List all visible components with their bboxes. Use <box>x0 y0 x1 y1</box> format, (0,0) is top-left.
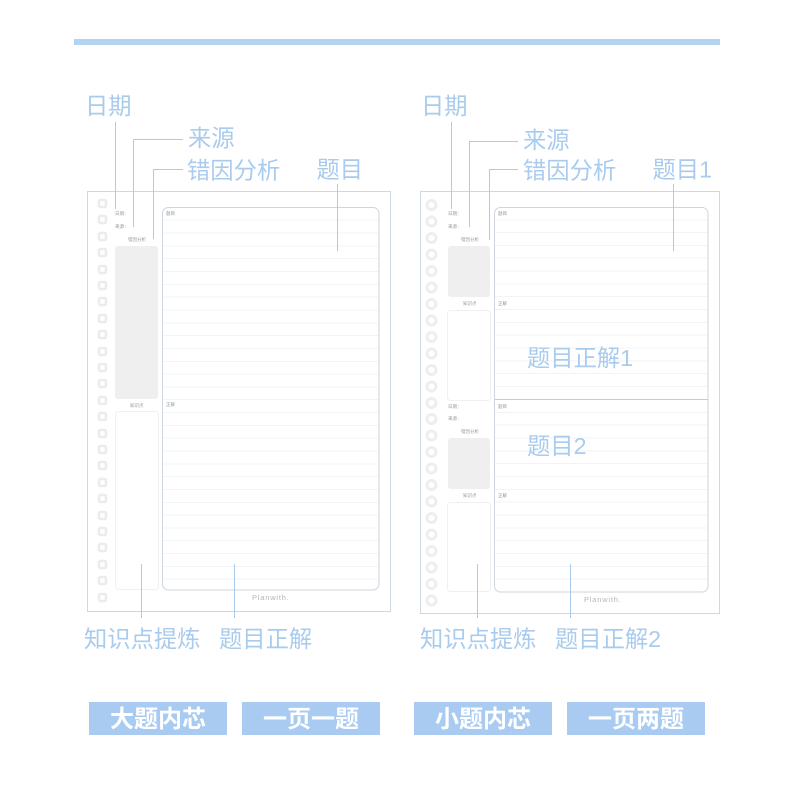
label: answer: 题目正解 <box>219 626 312 652</box>
panel: left page, big question layout <box>88 192 390 612</box>
label: question: 题目 <box>316 156 363 182</box>
small field labels: 错因分析 <box>128 236 146 243</box>
leader: question 1 <box>672 184 674 251</box>
label: question 2: 题目2 <box>527 433 587 459</box>
knowledge points box one <box>448 310 490 400</box>
leader: answer 2 <box>570 564 572 618</box>
ruled lines <box>163 220 378 579</box>
brand mark: Planwith. <box>584 595 622 604</box>
knowledge points box <box>116 412 158 590</box>
error analysis box one <box>448 246 490 297</box>
small field labels: 日期： <box>448 404 462 410</box>
badge: big question insert <box>89 702 227 735</box>
binding holes <box>427 200 436 605</box>
left callouts <box>84 93 363 652</box>
small field labels: 来源： <box>115 223 128 230</box>
small field labels: 来源： <box>448 415 462 422</box>
binding holes <box>99 200 106 601</box>
page frame <box>88 192 390 612</box>
leader: source <box>134 140 183 227</box>
badge: small question insert: 小题内芯 <box>435 706 531 733</box>
label: answer 2: 题目正解2 <box>555 626 661 652</box>
label: source: 来源 <box>188 125 235 151</box>
badge: big question insert: 大题内芯 <box>110 706 206 733</box>
top bar <box>74 39 720 45</box>
small field labels: 日期： <box>115 211 128 217</box>
brand mark: Planwith. <box>252 593 290 602</box>
small field labels: 知识点 <box>463 300 477 307</box>
leader: knowledge points <box>476 564 478 618</box>
leader: answer <box>234 564 236 618</box>
label: error analysis: 错因分析 <box>187 158 280 184</box>
badge: one question per page <box>242 702 380 735</box>
label: knowledge points: 知识点提炼 <box>420 626 536 652</box>
leader: question <box>336 184 338 251</box>
error analysis box two <box>448 438 490 489</box>
label: knowledge points: 知识点提炼 <box>84 626 200 652</box>
small field labels <box>448 211 507 499</box>
leader: error analysis <box>490 170 518 240</box>
leader: source <box>470 142 518 227</box>
leader: knowledge points <box>140 564 142 618</box>
badge: small question insert <box>414 702 552 735</box>
small field labels: 正解 <box>166 401 175 408</box>
divider between the two questions <box>495 398 708 400</box>
ruled lines <box>495 220 707 579</box>
small field labels: 题目 <box>166 211 175 217</box>
small field labels: 错因分析 <box>461 236 479 243</box>
panel: right page, small question layout <box>420 192 720 614</box>
right callouts <box>420 93 712 652</box>
small field labels: 正解 <box>498 300 507 307</box>
badge: one question per page: 一页一题 <box>263 706 359 733</box>
small field labels <box>115 211 175 409</box>
question and answer panel <box>162 208 379 590</box>
badge: two questions per page: 一页两题 <box>588 706 684 733</box>
label: date: 日期 <box>85 93 132 119</box>
leader: date <box>114 122 116 209</box>
small field labels: 知识点 <box>130 402 144 409</box>
question and answer panel <box>494 208 708 592</box>
label: question 1: 题目1 <box>652 156 712 182</box>
leader: date <box>450 122 452 209</box>
label: question answer 1: 题目正解1 <box>527 345 633 371</box>
badge: two questions per page <box>567 702 705 735</box>
knowledge points box two <box>448 502 490 592</box>
small field labels: 来源： <box>448 223 462 230</box>
small field labels: 题目 <box>498 211 507 217</box>
small field labels: 日期： <box>448 211 462 217</box>
small field labels: 题目 <box>498 404 507 410</box>
leader: error analysis <box>154 170 183 239</box>
small field labels: 正解 <box>498 492 507 499</box>
label: error analysis: 错因分析 <box>523 158 616 184</box>
label: source: 来源 <box>523 127 570 153</box>
error analysis box <box>115 246 158 399</box>
small field labels: 错因分析 <box>461 428 479 435</box>
label: date: 日期 <box>421 93 468 119</box>
page frame <box>420 192 720 614</box>
small field labels: 知识点 <box>463 492 477 499</box>
